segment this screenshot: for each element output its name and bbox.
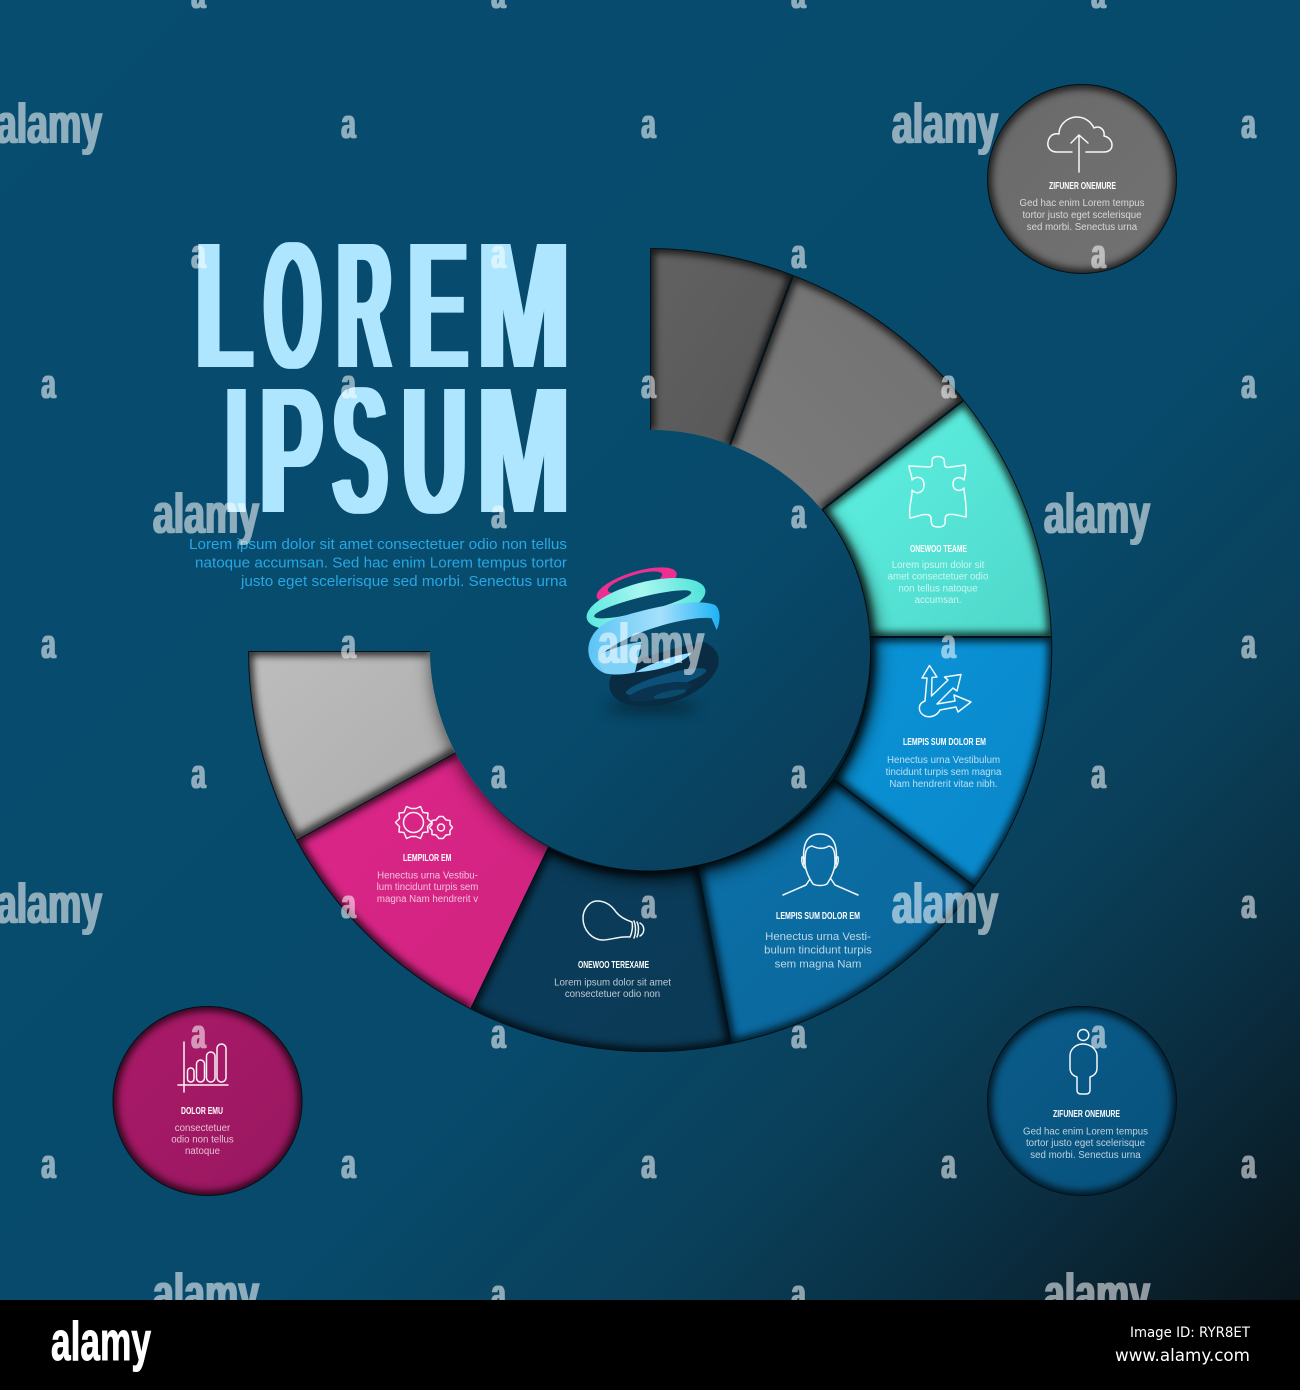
text block: bulum tincidunt turpis (764, 944, 872, 956)
title: U (403, 348, 466, 554)
watermarks: a (492, 1270, 506, 1317)
panel: magenta circle (112, 1006, 302, 1196)
text block (171, 1123, 234, 1157)
blue segment content (886, 666, 1002, 790)
panel: teal segment background (822, 400, 1052, 637)
text block: sem magna Nam (775, 958, 861, 970)
sphere pink ribbon (593, 560, 680, 610)
watermarks: a (942, 360, 956, 407)
sphere dark ribbon (601, 626, 727, 719)
navy segment content (554, 901, 671, 1000)
watermarks: a (792, 1010, 806, 1057)
watermarks: a (492, 230, 506, 277)
sphere shadow (606, 701, 698, 713)
heading: ZIFUNER ONEMURE (1049, 180, 1116, 192)
central disc (430, 430, 870, 870)
watermarks: a (792, 230, 806, 277)
icon: bar chart (178, 1042, 228, 1092)
icon: gears (396, 806, 452, 838)
text block: Nam hendrerit vitae nibh. (889, 779, 998, 790)
watermarks: alamy (0, 872, 102, 936)
text block: non tellus natoque (898, 584, 978, 594)
footer bar (0, 1300, 1300, 1390)
watermarks: a (1092, 750, 1106, 797)
website: www.alamy.com (1115, 1346, 1250, 1366)
text block: tortor justo eget scelerisque (1026, 1138, 1145, 1149)
panel: blue circle (987, 1006, 1177, 1196)
watermarks: a (1242, 620, 1256, 667)
watermarks: alamy (153, 482, 259, 546)
text block: Henectus urna Vestibulum (887, 755, 1000, 766)
icon: person (1070, 1030, 1097, 1094)
text block: Lorem ipsum dolor sit (892, 560, 985, 571)
watermarks: a (342, 880, 356, 927)
heading: LEMPIS SUM DOLOR EM (776, 910, 860, 922)
watermarks: a (792, 750, 806, 797)
watermarks: a (492, 750, 506, 797)
watermarks: a (792, 1270, 806, 1317)
watermarks: alamy (598, 612, 704, 676)
watermarks: a (342, 360, 356, 407)
subtitle text: natoque accumsan. Sed hac enim Lorem tempus tortor (195, 554, 567, 572)
watermarks: a (42, 620, 56, 667)
sphere blue hole (595, 616, 720, 670)
heading: ZIFUNER ONEMURE (1053, 1108, 1120, 1120)
icon: puzzle piece (909, 456, 966, 527)
text block: tortor justo eget scelerisque (1022, 210, 1142, 221)
title: P (260, 348, 322, 554)
subtitle text: Lorem ipsum dolor sit amet consectetuer odio non tellus (189, 536, 567, 553)
central disc shadow (433, 435, 877, 879)
title: M (478, 202, 570, 410)
watermarks: a (492, 490, 506, 537)
sphere teal ribbon (581, 568, 711, 640)
icon: branching arrows (919, 666, 971, 717)
text block: accumsan. (915, 595, 961, 606)
circle background (112, 1006, 302, 1196)
title: R (337, 202, 391, 410)
text block: Henectus urna Vesti- (765, 931, 871, 943)
title: L (196, 202, 252, 410)
watermarks: a (1242, 360, 1256, 407)
watermarks: a (342, 620, 356, 667)
text block (886, 755, 1002, 790)
watermarks: a (342, 100, 356, 147)
subtitle text (189, 536, 568, 590)
watermarks: a (42, 1140, 56, 1187)
text block: lum tincidunt turpis sem (377, 882, 478, 893)
title: O (265, 202, 321, 410)
watermarks: a (342, 1140, 356, 1187)
panel: light grey segment (248, 651, 456, 840)
teal segment content (888, 456, 988, 606)
watermarks: a (792, 490, 806, 537)
watermarks: alamy (1044, 482, 1150, 546)
watermarks: a (1242, 100, 1256, 147)
sphere blue ribbon (588, 602, 720, 673)
panel: grey segment 1 (650, 248, 793, 445)
text block: consectetuer odio non (565, 989, 660, 1000)
icon: person bust (783, 834, 858, 895)
title (196, 202, 570, 554)
title: I (226, 348, 247, 554)
watermarks: a (192, 750, 206, 797)
mid blue segment content (764, 834, 872, 970)
text block: amet consectetuer odio (888, 572, 988, 582)
panel: magenta segment background (296, 752, 548, 1009)
text block: Ged hac enim Lorem tempus (1020, 198, 1145, 209)
heading: LEMPIS SUM DOLOR EM (903, 736, 986, 748)
text block: natoque (185, 1146, 220, 1157)
sphere ribbons (581, 560, 727, 719)
panel: grey circle (987, 84, 1177, 274)
watermarks: a (642, 360, 656, 407)
heading: ONEWOO TEREXAME (578, 959, 649, 971)
watermarks: a (1092, 1010, 1106, 1057)
heading: DOLOR EMU (181, 1105, 223, 1117)
icon: light bulb (583, 901, 644, 940)
watermarks: alamy (892, 872, 998, 936)
panel: navy segment background (470, 847, 731, 1052)
circle background (987, 84, 1177, 274)
text block: consectetuer (175, 1123, 231, 1134)
text block: Lorem ipsum dolor sit amet (554, 978, 671, 988)
image id: Image ID: RYR8ET (1130, 1325, 1250, 1341)
sphere logo (581, 560, 727, 719)
text block (377, 870, 478, 905)
text block (764, 931, 872, 970)
icon: cloud upload (1048, 117, 1112, 172)
subtitle text: justo eget scelerisque sed morbi. Senectus urna (240, 573, 568, 590)
watermarks: a (492, 1010, 506, 1057)
watermarks: a (642, 100, 656, 147)
title: S (333, 348, 387, 554)
text block: Henectus urna Vestibu- (377, 870, 478, 882)
panel: blue segment background (833, 637, 1052, 887)
watermarks: a (192, 1010, 206, 1057)
donut chart (248, 248, 1052, 1052)
watermarks: a (1242, 880, 1256, 927)
text block: sed morbi. Senectus urna (1027, 222, 1138, 233)
panel: grey segment 2 (730, 275, 964, 510)
text block: Ged hac enim Lorem tempus (1023, 1126, 1148, 1138)
footer logo: alamy (51, 1310, 151, 1372)
watermarks: a (192, 230, 206, 277)
text block: odio non tellus (171, 1134, 234, 1146)
watermarks: alamy (892, 92, 998, 156)
sphere light streak (635, 653, 692, 672)
text block (554, 978, 671, 1000)
watermarks: alamy (1044, 1262, 1150, 1326)
title: M (478, 348, 570, 554)
watermarks: a (642, 880, 656, 927)
sphere lower light band (595, 642, 642, 674)
heading: ONEWOO TEAME (910, 543, 967, 555)
heading: LEMPILOR EM (403, 852, 452, 864)
circle background (987, 1006, 1177, 1196)
text block (1020, 198, 1145, 233)
watermarks: a (942, 620, 956, 667)
watermarks: a (1092, 230, 1106, 277)
magenta segment content (377, 806, 478, 905)
text block (888, 560, 988, 606)
watermarks: a (1242, 1140, 1256, 1187)
watermarks: a (642, 1140, 656, 1187)
text block: tincidunt turpis sem magna (886, 767, 1002, 778)
text block (1023, 1126, 1148, 1161)
watermarks: alamy (153, 1262, 259, 1326)
watermarks: alamy (0, 92, 102, 156)
watermarks: a (942, 1140, 956, 1187)
watermarks: a (42, 360, 56, 407)
text block: sed morbi. Senectus urna (1030, 1150, 1141, 1161)
title: E (408, 202, 468, 410)
panel: mid blue segment background (697, 779, 975, 1044)
text block: magna Nam hendrerit v (377, 894, 478, 905)
